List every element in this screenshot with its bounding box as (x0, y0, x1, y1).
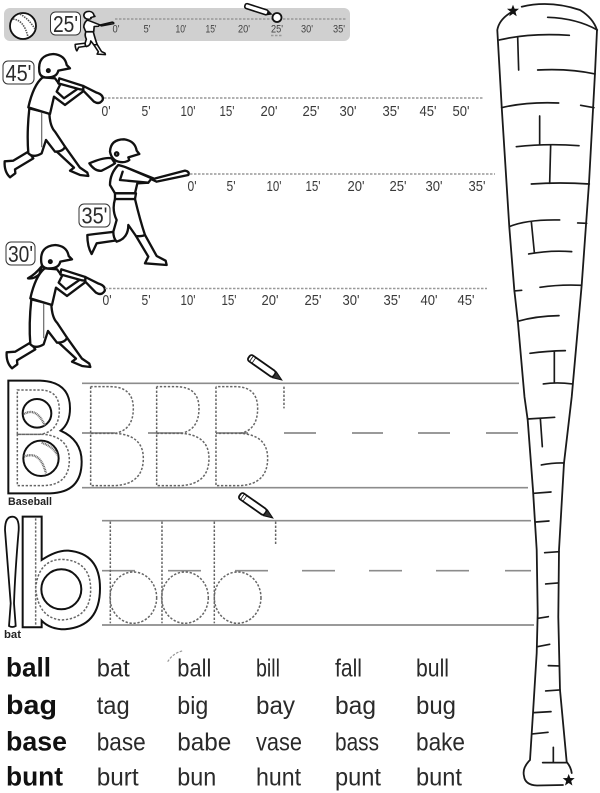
distance labels: 30' (301, 24, 313, 36)
distance labels: 35' (384, 292, 401, 309)
distance labels: 0' (102, 292, 112, 309)
row: bag: big (177, 692, 208, 720)
distance tag: 25 feet: 25' (53, 11, 78, 37)
row: ball: ball (177, 655, 211, 683)
row: base: vase (256, 729, 302, 757)
row: bag: bug (416, 692, 456, 720)
row: base: base (97, 729, 146, 757)
distance labels: 35' (333, 24, 345, 36)
distance labels: 15' (306, 178, 321, 195)
distance tag: 45 feet: 45' (6, 60, 32, 86)
dotted arc example (168, 651, 183, 662)
row: base: babe (177, 729, 231, 757)
batter figure (7, 245, 105, 368)
dotted distance line (105, 288, 487, 290)
distance labels: 10' (180, 292, 196, 309)
row: bunt: hunt (256, 764, 301, 792)
row: bag: bag (335, 692, 376, 720)
dotted distance line (115, 18, 346, 20)
traceable letters b (110, 522, 276, 623)
distance tag: 30 feet: 30' (8, 241, 33, 267)
icon: finish star (563, 774, 575, 786)
distance labels (102, 292, 475, 309)
distance labels: 25' (304, 292, 322, 309)
distance labels: 45' (458, 292, 475, 309)
large letter B with baseballs (8, 381, 82, 493)
row: base: bake (416, 729, 465, 757)
distance labels: 5' (226, 178, 236, 195)
distance labels: 20' (262, 292, 279, 309)
distance labels: 45' (420, 103, 437, 120)
row: base: base (6, 727, 67, 757)
dotted distance line (190, 173, 495, 175)
row: bag (6, 690, 456, 720)
distance tag: 35 feet: 35' (82, 202, 108, 228)
distance labels: 20' (260, 103, 278, 120)
row: bunt: bunt (6, 762, 63, 792)
distance labels: 10' (180, 103, 196, 120)
batter 30 feet with number line (6, 241, 487, 368)
distance labels (102, 103, 470, 120)
distance labels: 15' (222, 292, 237, 309)
distance labels: 30' (426, 178, 443, 195)
panel: example number line (4, 3, 350, 55)
panel: lowercase b tracing (4, 492, 534, 641)
row: base (6, 727, 465, 757)
writing lines (82, 383, 528, 488)
icon: start star (507, 5, 519, 16)
row: base: bass (335, 729, 379, 757)
icon: baseball (10, 13, 36, 39)
panel: uppercase B tracing (8, 354, 528, 508)
row: ball: fall (335, 655, 362, 683)
icon: bat (5, 517, 19, 627)
distance labels: 35' (382, 103, 400, 120)
distance labels: 20' (348, 178, 365, 195)
distance labels: 10' (266, 178, 282, 195)
distance labels (112, 24, 345, 36)
row: bag: tag (97, 692, 130, 720)
distance labels: 30' (340, 103, 357, 120)
row: bunt: punt (335, 764, 381, 792)
traceable letters B (91, 387, 284, 486)
distance labels: 0' (102, 103, 111, 120)
caption: bat: bat (4, 629, 21, 641)
row: ball: bat (97, 655, 130, 683)
distance labels: 0' (112, 24, 120, 36)
distance labels: 0' (188, 178, 197, 195)
distance labels: 50' (452, 103, 470, 120)
distance labels: 15' (220, 103, 235, 120)
batter 45 feet with number line (3, 54, 483, 177)
batter figure (5, 54, 103, 177)
batter 35 feet with number line (79, 139, 495, 265)
maze walls lower (528, 417, 567, 763)
distance labels: 30' (342, 292, 360, 309)
dotted distance line (104, 97, 483, 99)
distance labels: 25' (390, 178, 407, 195)
row: bunt: burt (97, 764, 139, 792)
caption: Baseball: Baseball (8, 496, 52, 508)
icon: pencil (247, 354, 284, 383)
writing lines (102, 521, 534, 625)
row: ball: bill (256, 655, 280, 683)
distance labels: 25' (271, 24, 283, 36)
distance labels: 40' (420, 292, 438, 309)
row: bunt: bun (177, 764, 216, 792)
row: bag: bag (6, 690, 57, 720)
panel: word matching (6, 651, 465, 792)
maze walls upper (499, 17, 597, 384)
row: ball: ball (6, 653, 51, 683)
icon: pencil (238, 492, 275, 521)
icon: pencil with ball marker (244, 3, 282, 22)
bat maze (497, 4, 597, 786)
large letter b (23, 517, 100, 629)
distance labels: 20' (238, 24, 250, 36)
distance labels: 5' (144, 24, 150, 36)
row: bunt: bunt (416, 764, 462, 792)
bat outline (497, 4, 597, 786)
distance labels: 5' (142, 103, 151, 120)
row: bunt (6, 762, 462, 792)
distance labels: 25' (302, 103, 320, 120)
distance labels: 15' (206, 24, 216, 36)
distance labels: 10' (176, 24, 186, 36)
distance labels (188, 178, 486, 195)
row: ball (6, 653, 449, 683)
batter figure (87, 139, 189, 265)
small batter figure (75, 11, 114, 55)
distance labels: 5' (142, 292, 151, 309)
distance labels: 35' (468, 178, 486, 195)
row: bag: bay (256, 692, 295, 720)
row: ball: bull (416, 655, 449, 683)
